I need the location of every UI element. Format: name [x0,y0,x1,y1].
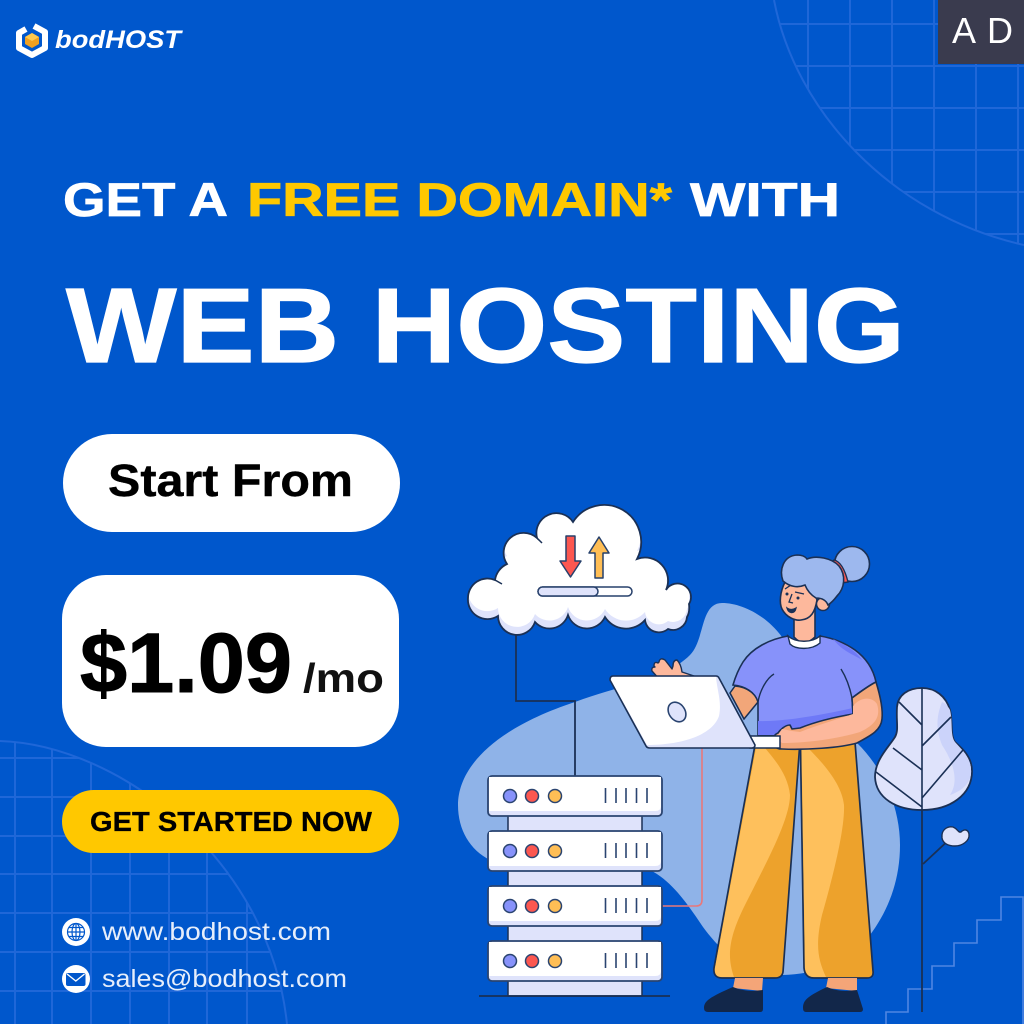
cable: laptop to server [662,748,702,906]
hair bun [834,546,870,582]
ad badge: AD [952,10,1013,51]
shirt collar [788,636,820,648]
pants [714,742,873,978]
server base line [479,995,670,997]
icon: download arrow [560,536,581,577]
icon: stairs outline [886,897,1023,1024]
right arm [773,682,882,749]
heading: get a free domain with: WITH [690,174,840,227]
left arm [730,686,758,719]
server unit 1 [488,776,662,816]
icon: upload arrow [589,537,609,578]
left hand [652,659,700,680]
ad badge [938,0,1024,64]
icon: cloud [468,497,691,635]
button: get started now: GET STARTED NOW [90,806,372,837]
facial features [785,585,804,613]
price panel [62,575,399,747]
logo wordmark: bodHOST [55,26,184,54]
small leaf [942,827,969,846]
laptop base [750,736,780,748]
tree crown [875,688,972,810]
icon: envelope [62,965,90,993]
right leg [800,742,873,978]
cable: cloud to server [516,630,575,776]
heading: get a free domain with: FREE DOMAIN* [247,174,673,227]
price: $1.09 [80,616,292,710]
laptop lid [610,676,755,748]
contact: email: sales@bodhost.com [102,965,347,993]
right shoe [803,987,863,1012]
progress bar [538,587,632,596]
server rack [479,776,670,996]
server unit 3 [488,886,662,926]
price unit: /mo [303,655,384,701]
button: get started now [62,790,399,853]
right ankle [733,978,857,991]
server unit 2 [488,831,662,871]
heading: web hosting: WEB HOSTING [66,267,905,385]
server column [508,812,642,996]
tree trunk and twig [922,688,952,1012]
icon: hexagon cube logo [19,26,45,55]
heading: get a free domain with [63,174,840,227]
left shoe [704,987,763,1012]
left leg [714,745,800,978]
pill: start from: Start From [108,455,353,506]
face [780,582,817,620]
pill: start from [63,434,400,532]
background blob [458,603,900,975]
ear [816,598,830,610]
icon: globe [62,918,90,946]
icon: tree [875,688,972,1012]
contact: website: www.bodhost.com [101,918,331,946]
hair [782,555,844,605]
server unit 4 [488,941,662,981]
shirt [733,636,876,735]
heading: get a free domain with: GET A [63,174,228,227]
person [652,546,882,1012]
laptop logo [664,699,690,725]
neck [794,605,815,642]
hair tie [833,560,848,583]
laptop [610,676,780,748]
logo: bodHOST [19,26,184,55]
